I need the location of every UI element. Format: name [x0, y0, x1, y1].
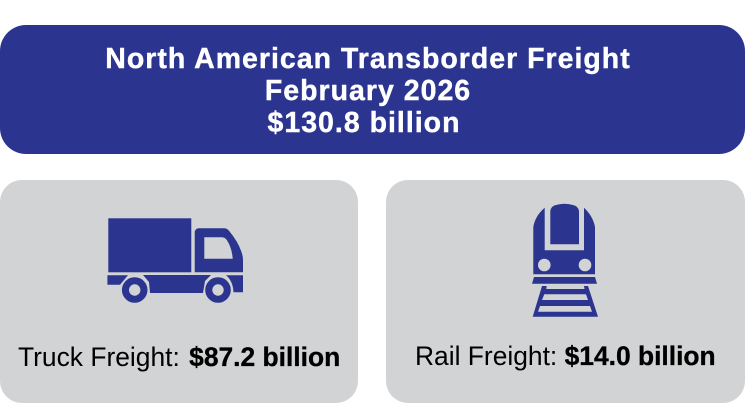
panel: rail freight	[386, 180, 745, 403]
icon: truck	[107, 218, 243, 303]
title	[105, 43, 631, 139]
title: $130.8 billion	[268, 107, 460, 139]
icon: train	[532, 204, 598, 317]
title: North American Transborder Freight	[105, 43, 631, 75]
header banner	[0, 25, 745, 154]
truck freight label: Truck Freight: $87.2 billion	[18, 342, 340, 372]
panel: truck freight	[0, 180, 358, 403]
title: February 2026	[265, 75, 471, 107]
rail freight label: Rail Freight: $14.0 billion	[415, 341, 716, 371]
